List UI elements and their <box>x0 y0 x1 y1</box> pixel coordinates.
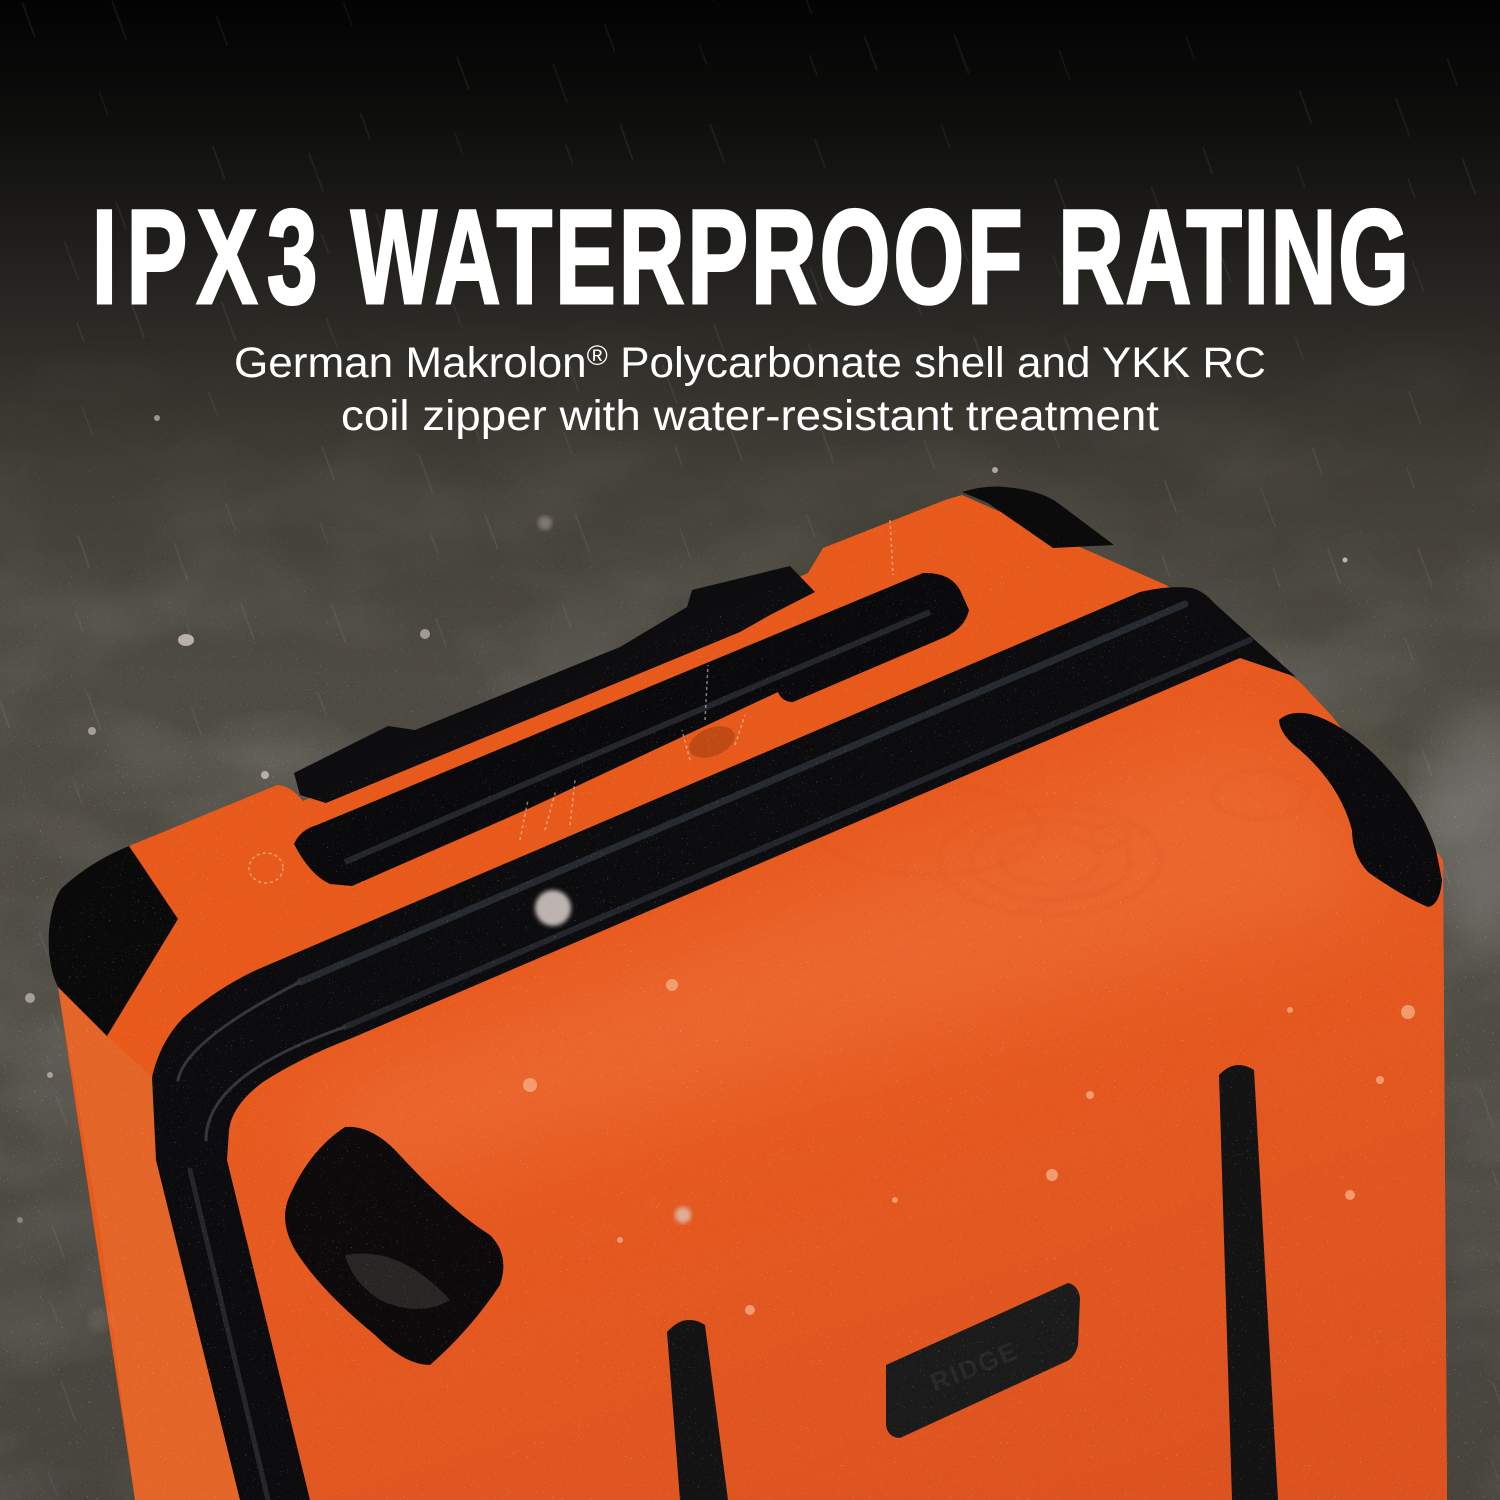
title: WATERPROOF <box>351 183 1023 332</box>
water speckle on suitcase <box>51 495 1446 1500</box>
title: RATING <box>1058 183 1409 332</box>
orange slot under handle <box>685 720 739 764</box>
front handle <box>294 573 969 886</box>
corner guard: top <box>962 487 1114 548</box>
subtitle: coil zipper with water-resistant treatment <box>341 392 1159 440</box>
suitcase left side panel <box>58 987 240 1500</box>
corner guard: left <box>49 846 178 1036</box>
corner guard: right <box>1279 713 1442 907</box>
splashes <box>249 520 893 883</box>
title <box>92 183 1409 332</box>
logo text: RIDGE <box>926 1335 1023 1398</box>
rear handle <box>294 566 815 803</box>
handle sheen <box>345 612 930 862</box>
zipper reflections <box>178 604 1250 1500</box>
corner guard: lower left bumper <box>285 1127 503 1365</box>
subtitle: ® <box>587 340 608 371</box>
left vertical groove <box>667 1320 728 1500</box>
shell ripples <box>820 771 1308 915</box>
title: IPX3 <box>92 183 318 332</box>
suitcase front shell <box>227 656 1447 1500</box>
logo badge <box>886 1283 1080 1438</box>
flying spray <box>17 415 1348 1332</box>
shell highlight <box>300 730 1380 1190</box>
subtitle: German Makrolon <box>234 339 578 387</box>
bumper highlight <box>345 1253 450 1309</box>
subtitle: Polycarbonate shell and YKK RC <box>608 339 1266 387</box>
suitcase body silhouette <box>49 495 1447 1500</box>
water droplets on shell <box>523 979 1415 1315</box>
zipper band <box>152 587 1296 1500</box>
suitcase <box>48 486 1447 1500</box>
right vertical groove <box>1219 1065 1278 1500</box>
subtitle <box>234 339 1266 440</box>
